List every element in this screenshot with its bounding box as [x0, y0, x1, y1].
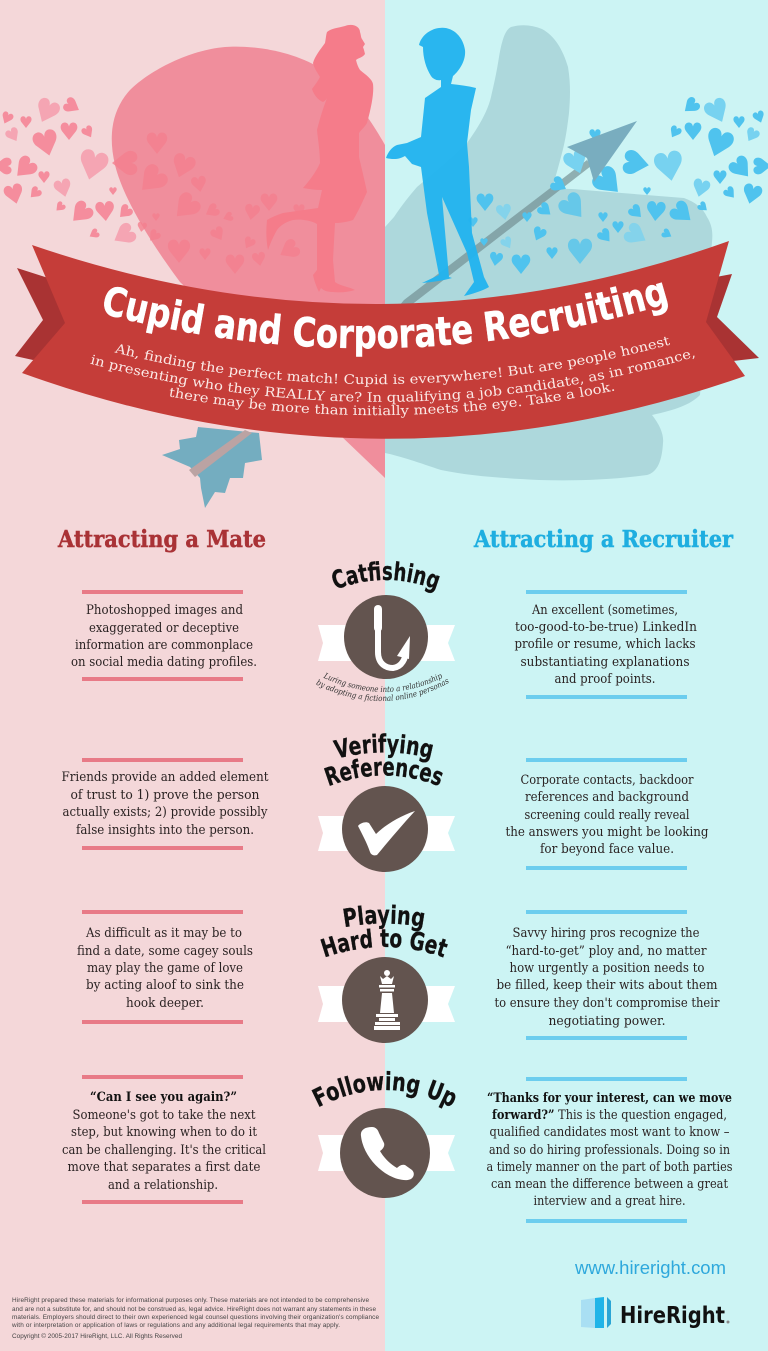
banner [22, 241, 745, 439]
badge title: Playing [343, 904, 424, 932]
heading: Attracting a Mate: Attracting a Mate [57, 526, 266, 553]
title: Cupid and Corporate Recruiting [104, 282, 668, 357]
badge caption: by adopting a fictional online personas [316, 679, 448, 702]
legal disclaimer: with or interpretation or application of laws or regulations and any additional legal requirements that may apply. [11, 1322, 340, 1329]
row: Catfishing right text: too-good-to-be-true) LinkedIn [515, 620, 698, 635]
row: Catfishing left text: on social media dating profiles. [71, 655, 257, 670]
row: Catfishing left text [71, 590, 257, 681]
banner ribbon [22, 241, 745, 439]
illustration: man silhouette [386, 28, 489, 296]
row: Following Up left text [62, 1075, 266, 1204]
row: Following Up right text: can mean the difference between a great [491, 1177, 729, 1192]
heading: Attracting a Recruiter: Attracting a Recruiter [473, 526, 734, 553]
badge circle [342, 957, 428, 1043]
row: Verifying right text: the answers you might be looking [506, 825, 708, 840]
row: Following Up center badge [312, 1070, 456, 1198]
row: Playing Hard left text: hook deeper. [126, 996, 204, 1011]
legal disclaimer: HireRight prepared these materials for informational purposes only. These materials are not intended to be comprehensive [12, 1297, 369, 1304]
panel: right aqua background [385, 0, 768, 1351]
icon: chess queen [374, 970, 400, 1030]
row: Playing Hard right text: how urgently a position needs to [510, 961, 705, 976]
icon: telephone handset [361, 1127, 414, 1180]
badge title [320, 904, 448, 958]
row: Following Up right text: and so do hiring professionals. Doing so in [489, 1143, 731, 1158]
row: Catfishing right text: An excellent (sometimes, [531, 603, 678, 618]
row: Verifying left text: actually exists; 2) provide possibly [62, 805, 268, 820]
intro text: in presenting who they REALLY are? In qualifying a job candidate, as in romance, [90, 352, 694, 404]
row: Playing Hard right text: Savvy hiring pros recognize the [512, 926, 700, 941]
icon: check mark [358, 811, 415, 855]
illustration: arrowhead [567, 121, 637, 182]
badge title: Verifying [332, 733, 433, 762]
row: Playing Hard left text: may play the game of love [87, 961, 243, 976]
row: Catfishing right text: and proof points. [554, 672, 656, 687]
row: Catfishing right text [514, 590, 698, 699]
legal disclaimer: Copyright © 2005-2017 HireRight, LLC. All Rights Reserved [12, 1332, 182, 1340]
badge title: Following Up [312, 1070, 456, 1109]
website url: www.hireright.com [574, 1257, 726, 1278]
badge title [324, 733, 443, 786]
row: Following Up right text: qualified candidates most want to know – [490, 1125, 730, 1140]
row: Following Up left text: Someone's got to take the next [72, 1108, 256, 1123]
logo: HireRight [581, 1297, 730, 1329]
arrow fletching [162, 427, 262, 508]
row: Verifying left text: Friends provide an added element [62, 770, 269, 785]
legal disclaimer: materials. Employers should direct to their own experienced legal counsel questions involving their organization's compliance [12, 1314, 379, 1321]
logo: HireRight: HireRight [620, 1303, 725, 1329]
intro text: Ah, finding the perfect match! Cupid is everywhere! But are people honest [114, 336, 670, 387]
ribbon [318, 625, 455, 661]
intro text: there may be more than initially meets the eye. Take a look. [170, 382, 614, 418]
badge title: Catfishing [332, 561, 440, 594]
ribbon [318, 816, 455, 851]
row: Following Up left text: can be challenging. It's the critical [62, 1143, 266, 1158]
row: Following Up left text: and a relationship. [108, 1178, 218, 1193]
row: Playing Hard right text: “hard-to-get” ploy and, no matter [506, 944, 707, 959]
row: Following Up right text: forward?” This is the question engaged, [492, 1108, 727, 1123]
row: Playing Hard left text: As difficult as it may be to [85, 926, 242, 941]
illustration: blue hand shape [385, 25, 712, 480]
row: Catfishing center badge [316, 561, 455, 702]
row: Playing Hard center badge [318, 904, 455, 1043]
row: Verifying left text: false insights into the person. [76, 823, 254, 838]
row: Playing Hard right text: to ensure they don't compromise their [494, 996, 720, 1011]
badge circle [344, 595, 428, 679]
illustration: arrow shaft [394, 160, 591, 316]
illustration: woman silhouette [266, 25, 373, 292]
legal disclaimer [11, 1297, 379, 1340]
row: Catfishing right text: profile or resume, which lacks [514, 637, 696, 652]
ribbon [318, 1135, 455, 1171]
row: Playing Hard right text: negotiating power. [548, 1014, 666, 1029]
ribbon [318, 986, 455, 1022]
row: Following Up right text: a timely manner on the part of both parties [486, 1160, 732, 1175]
row: Catfishing left text: information are commonplace [75, 638, 253, 653]
row: Verifying right text: references and background [525, 790, 689, 805]
badge circle [342, 786, 428, 872]
icon: fish hook [378, 609, 410, 668]
badge title: References [324, 758, 443, 786]
row: Playing Hard right text: be filled, keep their wits about them [496, 978, 718, 993]
banner ribbon tails [15, 268, 759, 361]
row: Following Up left text: move that separates a first date [68, 1160, 261, 1175]
illustration: pink heart shape [112, 47, 385, 478]
hearts: right cluster [468, 95, 768, 274]
row: Following Up right text: interview and a great hire. [534, 1194, 686, 1209]
row: Verifying right text [506, 758, 708, 870]
row: Verifying right text: Corporate contacts, backdoor [520, 773, 694, 788]
badge caption: Luring someone into a relationship [323, 672, 442, 692]
row: Verifying center badge [318, 733, 455, 872]
row: Following Up left text: “Can I see you again?” [90, 1090, 237, 1105]
row: Following Up left text: step, but knowing when to do it [71, 1125, 258, 1140]
row: Catfishing left text: Photoshopped images and [86, 603, 243, 618]
row: Playing Hard right text [494, 910, 720, 1040]
row: Playing Hard left text: find a date, some cagey souls [77, 944, 253, 959]
panel: left pink background [0, 0, 385, 1351]
legal disclaimer: and are not a substitute for, and should not be construed as, legal advice. HireRight does not warrant any statements in these [12, 1306, 376, 1313]
row: Following Up right text: “Thanks for your interest, can we move [487, 1091, 732, 1106]
row: Verifying right text: for beyond face value. [540, 842, 674, 857]
row: Playing Hard left text [77, 910, 253, 1024]
row: Catfishing left text: exaggerated or deceptive [89, 621, 239, 636]
row: Playing Hard left text: by acting aloof to sink the [86, 978, 244, 993]
row: Verifying right text: screening could really reveal [524, 808, 690, 823]
badge title: Hard to Get [320, 928, 448, 958]
hearts: left cluster [0, 96, 305, 274]
row: Verifying left text [62, 758, 269, 850]
badge circle [340, 1108, 430, 1198]
row: Verifying left text: of trust to 1) prove the person [70, 788, 260, 803]
row: Following Up right text [486, 1077, 732, 1223]
row: Catfishing right text: substantiating explanations [520, 655, 690, 670]
